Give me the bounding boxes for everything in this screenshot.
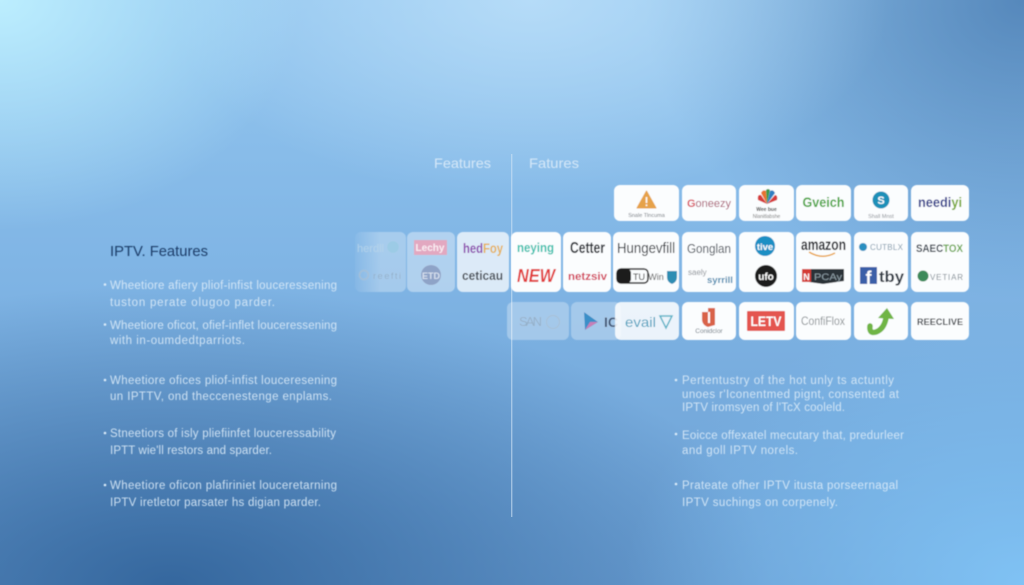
tile: needlyi	[911, 185, 969, 221]
tile: evail	[615, 302, 679, 340]
tile: cutblx and fb: f	[866, 268, 872, 288]
bullet 1: Wheetiore afiery pliof-infist louceressening	[110, 280, 337, 292]
row 2 logos	[355, 232, 969, 292]
tile: faded SAN	[507, 302, 569, 340]
note 3	[675, 480, 898, 509]
heading: left Features: Features	[434, 155, 491, 171]
note 1: IPTV iromsyen of l'TcX cooleld.	[682, 402, 845, 414]
tile: faded neril: herdll	[357, 243, 384, 255]
note 2: Eoicce offexatel mecutary that, predurleer	[682, 430, 904, 442]
tile: Gveich: Gveich	[802, 195, 844, 210]
bullet 1: tuston perate olugoo parder.	[110, 297, 275, 309]
tile: round S	[854, 185, 908, 221]
panel heading: IPTV. Features	[110, 243, 208, 260]
bullet 2: Wheetiore oficot, ofief-inflet louceressening	[110, 320, 337, 332]
note 1: unoes r'Iconentmed pignt, consented at	[682, 389, 900, 401]
bullet 5: IPTV iretletor parsater hs digian parder.	[110, 497, 321, 509]
tile: SAECTOX: VETIAR	[930, 273, 963, 282]
centre divider line	[511, 154, 512, 517]
tile: peacock: Wee bue	[756, 207, 777, 213]
tile: Conidar	[682, 302, 736, 340]
tile: LETV: LETV	[750, 314, 782, 329]
tile: peacock: Nlanitlabshe	[753, 214, 780, 220]
tile: cutblx and fb: CUTBLX	[870, 243, 904, 252]
bullet 5: Wheetiore oficon plafiriniet louceretarning	[110, 480, 337, 492]
tile: faded neril: reefti	[373, 271, 401, 282]
right panel: IPTV notes list	[675, 375, 904, 509]
bullet 4: IPTT wie'll restors and sparder.	[110, 445, 272, 457]
note 2: and goll IPTV norels.	[682, 445, 798, 457]
tile: hedFoy	[457, 232, 509, 292]
note 1	[675, 375, 900, 414]
tile: SAECTOX	[911, 232, 969, 292]
left panel: IPTV features list	[104, 243, 337, 509]
tile: hedFoy: hedFoy	[463, 240, 503, 256]
tile: Gveich	[796, 185, 851, 221]
tile: Cetter: netzsiv	[568, 271, 608, 283]
tile: Gonglan: saely	[688, 268, 707, 277]
tile: Gonglan: syrrill	[707, 275, 733, 286]
bullet 1	[104, 280, 337, 309]
tile: warning triangle	[614, 185, 679, 221]
tile: green arrow	[854, 302, 908, 340]
tile: Lechy: Lechy	[416, 243, 445, 254]
row 1 logos	[614, 185, 969, 221]
bullet 2	[104, 320, 337, 347]
bullet 5	[104, 480, 337, 509]
bullet 3: un IPTTV, ond theccenestenge enplams.	[110, 391, 332, 403]
tile: cutblx and fb	[854, 232, 908, 292]
bullet 4	[104, 428, 336, 457]
tile: hedFoy: ceticau	[462, 268, 503, 283]
tile: neying	[511, 232, 561, 292]
tile: faded neril	[355, 232, 406, 292]
tile: faded IC	[571, 302, 621, 340]
note 2	[675, 430, 904, 457]
bullet 2: with in-oumdedtparriots.	[109, 335, 245, 347]
bullet 3: Wheetiore ofices pliof-infist louceresening	[110, 375, 337, 387]
tile: Conflox	[796, 302, 851, 340]
tile: amazon	[796, 232, 851, 292]
tile: neying: NEW	[517, 266, 557, 286]
tile: warning triangle: Snale Tlncuma	[628, 213, 666, 219]
tile: round badges: tive	[757, 242, 773, 253]
bullet 4: Stneetiors of isly pliefiinfet louceressability	[110, 428, 336, 440]
tile: Lechy: ETD	[422, 271, 441, 281]
tile: Gonglan: Gonglan	[687, 241, 731, 256]
tile: faded SAN: SAN	[519, 314, 542, 329]
tile: Goneczy: Goneezy	[687, 198, 731, 210]
heading: right Features: Fatures	[529, 155, 579, 171]
tile: Hungevfill: Win	[648, 272, 664, 282]
tile: Gonglan	[682, 232, 736, 292]
tile: round S: S	[877, 195, 885, 207]
tile: needlyi: neediyi	[918, 194, 962, 210]
tile: round badges	[739, 232, 794, 292]
tile: peacock	[739, 185, 794, 221]
tile: round badges: ufo	[758, 272, 774, 283]
tile: Goneczy	[682, 185, 736, 221]
tile: neying: neying	[517, 240, 554, 255]
tile: Cetter: Cetter	[570, 240, 605, 257]
tile: amazon: N	[803, 272, 810, 282]
tile: round S: Shall Mnst	[868, 214, 894, 220]
logo grid	[355, 185, 969, 340]
tile: cutblx and fb: tby	[879, 269, 904, 286]
note 3: IPTV suchings on corpenely.	[682, 497, 838, 509]
tile: Hungevfill: Hungevfill	[617, 241, 675, 257]
tile: Conflox: ConfiFlox	[801, 314, 845, 328]
tile: REECLIVE	[911, 302, 969, 340]
tile: Conidar: Conidclor	[695, 328, 724, 335]
tile: amazon: amazon	[801, 237, 846, 254]
tile: LETV	[739, 302, 794, 340]
tile: Hungevfill	[613, 232, 679, 292]
tile: amazon: PCAy	[814, 272, 842, 283]
row 3 logos	[507, 302, 969, 340]
tile: SAECTOX: SAECTOX	[916, 243, 964, 255]
tile: Lechy	[407, 232, 455, 292]
tile: evail: evail	[625, 314, 656, 330]
note 1: Pertentustry of the hot unly ts actuntly	[682, 375, 894, 387]
tile: REECLIVE: REECLIVE	[917, 317, 963, 327]
note 3: Prateate ofher IPTV itusta porseernagal	[682, 480, 898, 492]
tile: faded IC: IC	[604, 314, 618, 330]
tile: Cetter	[563, 232, 611, 292]
bullet 3	[104, 375, 337, 403]
tile: Hungevfill: TU	[633, 272, 645, 282]
